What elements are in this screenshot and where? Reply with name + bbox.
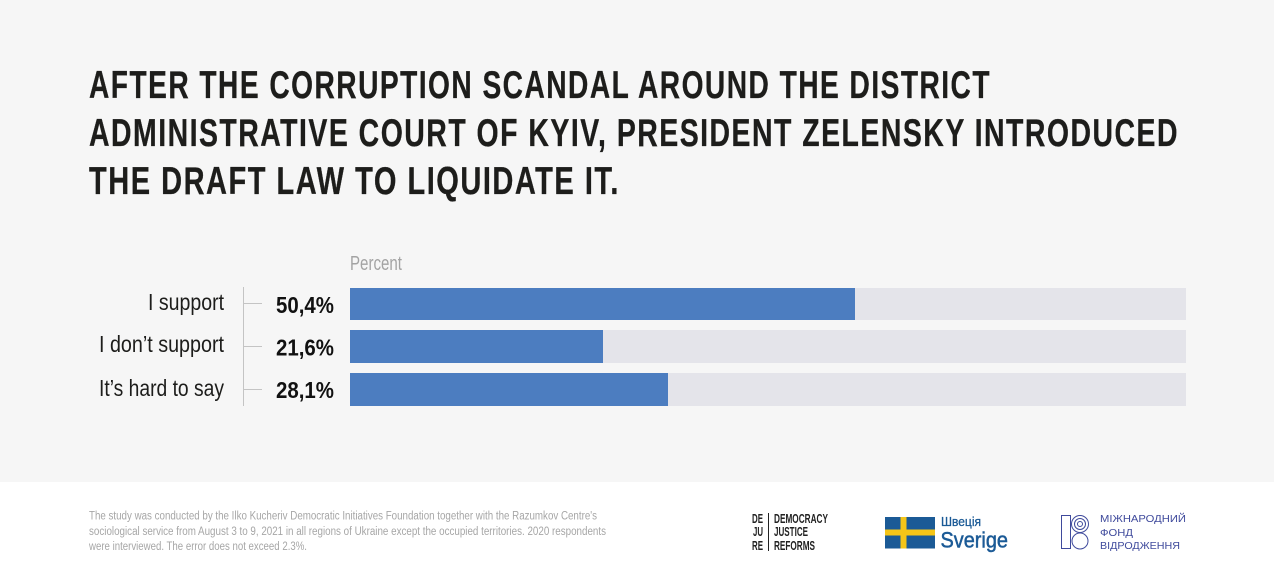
footnote: The study was conducted by the Ilko Kucheriv Democratic Initiatives Foundation together with the Razumkov Centre's (89, 510, 597, 522)
axis title: Percent: Percent (350, 253, 402, 275)
logo: Sverige: Швеція (941, 515, 981, 529)
logo: De Jure: RE (752, 539, 763, 553)
logo: De Jure: JUSTICE (774, 525, 808, 539)
footnote (88, 510, 606, 553)
logo: International Renaissance Foundation: ВІДРОДЖЕННЯ (1100, 540, 1180, 552)
panel: footer background (0, 482, 1274, 580)
row values: 28,1% (276, 377, 334, 403)
row labels: It’s hard to say (99, 375, 224, 401)
logo: De Jure: DEMOCRACY (774, 512, 828, 526)
row labels: I don’t support (99, 331, 225, 357)
logo: De Jure (752, 512, 828, 553)
bracket lines (244, 287, 262, 406)
title (89, 64, 1179, 203)
bar values (350, 288, 855, 406)
row labels (99, 289, 225, 401)
logo: Sverige (885, 515, 1008, 552)
icon: Swedish flag (885, 517, 935, 548)
logo: De Jure: REFORMS (774, 539, 815, 553)
icon: foundation mark (1062, 516, 1088, 549)
row values (276, 292, 334, 403)
logo: De Jure: DE (752, 512, 763, 526)
footnote: sociological service from August 3 to 9, 2021 in all regions of Ukraine except the occupied territories. 2020 respondents (89, 526, 606, 538)
logo: De Jure: JU (753, 525, 763, 539)
row values: 50,4% (276, 292, 334, 318)
logo: International Renaissance Foundation: МІЖНАРОДНИЙ (1100, 512, 1186, 525)
row labels: I support (148, 289, 225, 315)
logo: Sverige: Sverige (940, 528, 1008, 552)
bar tracks (350, 288, 1186, 406)
logo: International Renaissance Foundation: ФОНД (1100, 527, 1133, 539)
logo: International Renaissance Foundation (1062, 512, 1186, 552)
row values: 21,6% (276, 334, 334, 360)
bar chart (99, 287, 1186, 406)
title: THE DRAFT LAW TO LIQUIDATE IT. (89, 160, 620, 203)
footnote: were interviewed. The error does not exceed 2.3%. (88, 541, 307, 553)
